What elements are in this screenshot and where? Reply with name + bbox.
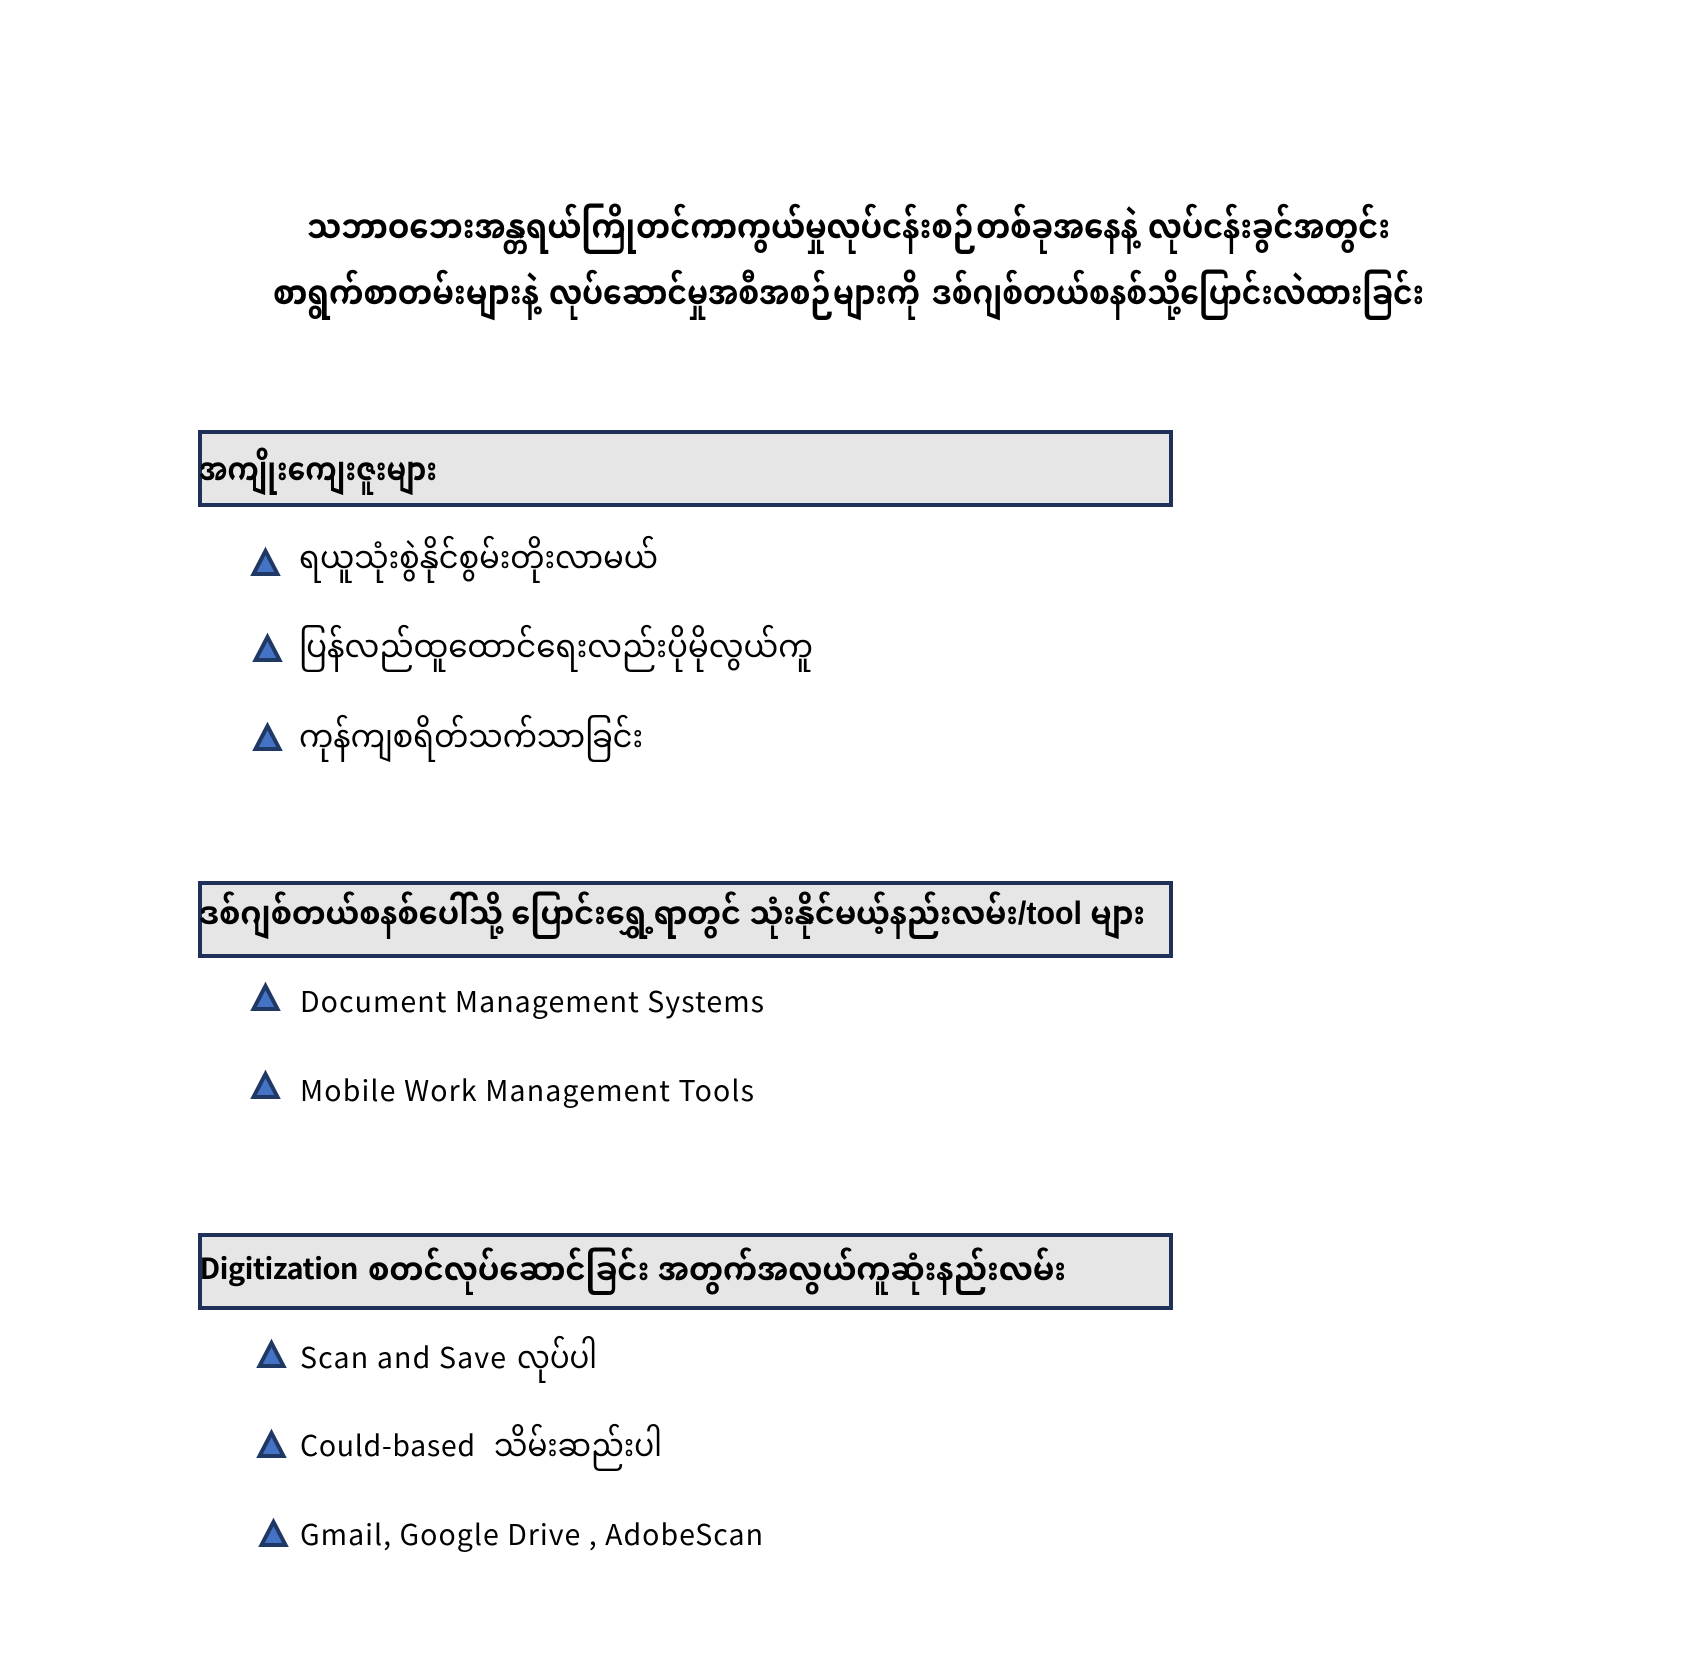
benefit item 1: ရယူသုံးစွဲနိုင်စွမ်းတိုးလာမယ် [299,534,658,583]
title: လုပ်ငန်းခွင်အတွင်း [1148,203,1390,254]
benefit item 2: ပြန်လည်ထူထောင်ရေးလည်းပိုမိုလွယ်ကူ [299,623,813,672]
panel: benefits heading [199,432,1171,505]
getting started list [260,1334,763,1554]
panel: tools heading: ဒစ်ဂျစ်တယ်စနစ်ပေါ်သို့ ပြောင်းရွှေ့ရာတွင် သုံးနိုင်မယ့်နည်းလမ်း/tool များ [199,891,1145,940]
start item 2: သိမ်းဆည်းပါ [494,1422,662,1471]
title: စာရွက်စာတမ်းများနဲ့ [273,269,542,321]
panel: tools heading [199,883,1171,956]
tool item 2: Mobile Work Management Tools [300,1069,754,1110]
icon: triangle bullet [262,1522,286,1545]
icon: triangle bullet [254,1074,278,1097]
tools list [254,980,764,1110]
icon: triangle bullet [254,551,278,574]
start item 1: လုပ်ပါ [517,1334,597,1383]
icon: triangle bullet [260,1433,284,1456]
title: ဒစ်ဂျစ်တယ်စနစ်သို့ပြောင်းလဲထားခြင်း [932,269,1424,321]
start item 1: Scan and Save [300,1336,506,1377]
start item 1 [300,1334,597,1383]
icon: triangle bullet [256,637,280,660]
panel: getting started heading: စတင်လုပ်ဆောင်ခြင်း အတွက်အလွယ်ကူဆုံးနည်းလမ်း [368,1247,1066,1295]
start item 3: Gmail, Google Drive , AdobeScan [300,1513,763,1554]
start item 2: Could-based [300,1424,475,1465]
tool item 1: Document Management Systems [300,980,764,1021]
title: သဘာဝဘေးအန္တရယ်ကြိုတင်ကာကွယ်မှုလုပ်ငန်းစဉ်တစ်ခုအနေနဲ့ [307,203,1141,254]
start item 2 [300,1422,662,1471]
title [273,203,1424,321]
title: လုပ်ဆောင်မှုအစီအစဉ်များကို [549,269,920,321]
icon: triangle bullet [256,726,280,749]
benefits list [254,534,813,762]
icon: triangle bullet [260,1343,284,1366]
panel: getting started heading: Digitization [200,1246,358,1288]
benefit item 3: ကုန်ကျစရိတ်သက်သာခြင်း [299,713,643,762]
icon: triangle bullet [254,986,278,1009]
panel: benefits heading: အကျိုးကျေးဇူးများ [199,447,437,496]
panel: getting started heading [200,1235,1171,1308]
